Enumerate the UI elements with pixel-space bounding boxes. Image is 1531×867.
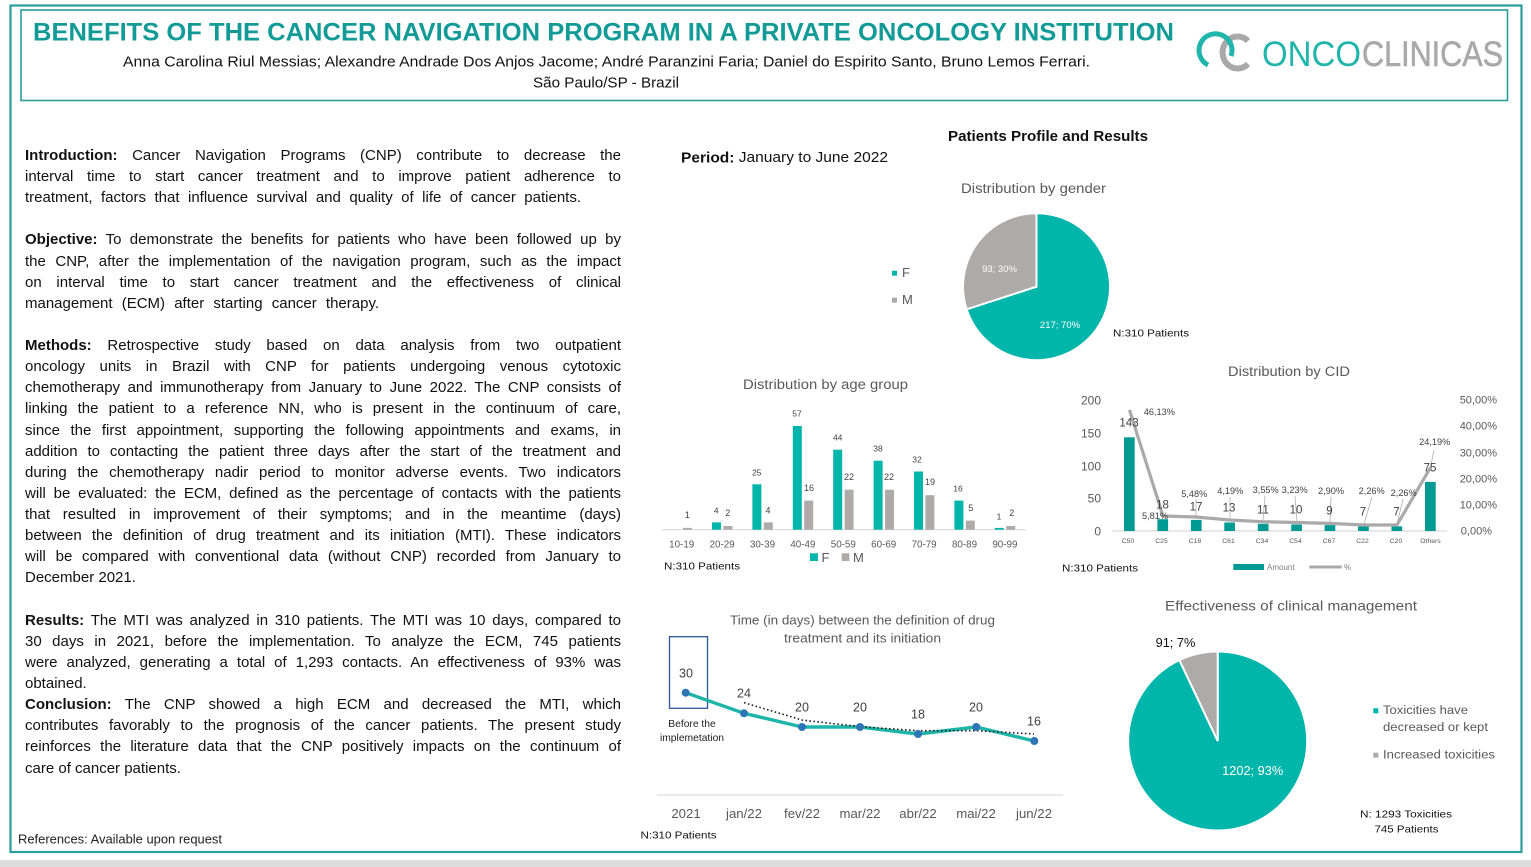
left axis: 100 (1081, 460, 1101, 474)
text block: methods: since the first appointment, supporting the following appointments and exams, in (25, 422, 621, 439)
right axis: 10,00% (1460, 500, 1497, 512)
value labels: F: 4 (714, 506, 719, 516)
value labels: amount: 10 (1290, 504, 1302, 516)
text block: methods: during the chemotherapy nadir period to monitor adverse events. Two indicators (25, 464, 621, 481)
text block: methods: December 2021. (25, 569, 136, 586)
note: N effectiveness: N: 1293 Toxicities (1360, 808, 1452, 820)
trend line (744, 703, 1034, 734)
value labels: amount: 75 (1424, 462, 1436, 474)
percent labels: 2,90% (1318, 486, 1344, 496)
legend: age: M (853, 550, 864, 565)
right axis: 40,00% (1460, 420, 1497, 432)
left axis (1081, 394, 1101, 538)
note: N CID: N:310 Patients (1062, 562, 1138, 574)
category labels: months: jan/22 (725, 806, 762, 821)
category labels: CID: C54 (1289, 538, 1302, 545)
percent labels: 5,48% (1181, 489, 1207, 499)
category labels: age: 90-99 (992, 540, 1017, 550)
text block: methods: oncology units in Brazil with CNP for patients undergoing venous cytotoxic (25, 358, 621, 375)
text block: introduction: Introduction: Cancer Navigation Programs (CNP) contribute to decrease the (25, 147, 621, 164)
data line (686, 693, 1034, 741)
text block: conclusion: care of cancer patients. (25, 760, 181, 777)
category labels: age: 70-79 (912, 540, 937, 550)
label: 91: 91; 7% (1156, 635, 1195, 650)
text block: conclusion (25, 696, 622, 777)
markers (682, 689, 1038, 745)
category labels: age: 60-69 (871, 540, 896, 550)
text block: results: were analyzed, generating a total of 1,293 contacts. An effectiveness of 93% was (25, 654, 621, 671)
legend: gender (892, 265, 913, 307)
logo: OncoClínicas: CLINICAS (1362, 35, 1503, 74)
text block: results: 30 days in 2021, before the implementation. To analyze the ECM, 745 patients (25, 633, 621, 650)
legend: CID: Amount (1267, 563, 1295, 572)
category labels: age: 50-59 (831, 540, 856, 550)
text block: methods: between the definition of drug treatment and its initiation (MTI). These indicators (25, 527, 621, 544)
percent labels: 46,13% (1144, 407, 1175, 417)
note: N effectiveness (1360, 808, 1452, 836)
title: BENEFITS OF THE CANCER NAVIGATION PROGRAM IN A PRIVATE ONCOLOGY INSTITUTION (33, 18, 1174, 46)
category labels: CID: C18 (1189, 538, 1201, 545)
value labels: days (679, 666, 1041, 728)
annotation: before implementation: implemetation (660, 733, 724, 744)
pie slice: F (967, 213, 1110, 360)
legend: gender: M (902, 292, 913, 307)
text block: objective: management (ECM) after starting cancer therapy. (25, 295, 379, 312)
header box (21, 10, 1508, 100)
label: F value: 217; 70% (1040, 320, 1081, 331)
legend: effectiveness (1373, 705, 1495, 762)
value labels: F: 57 (792, 408, 802, 418)
value labels: amount: 9 (1326, 506, 1333, 518)
value labels: F: 44 (833, 432, 843, 442)
value labels: M: 2 (1009, 508, 1014, 518)
value labels: F: 1 (997, 512, 1002, 522)
value labels: M (685, 472, 1014, 520)
text block: introduction: interval time to start cancer treatment and to improve patient adherence to (25, 168, 621, 185)
legend: effectiveness: decreased or kept (1383, 722, 1489, 734)
category labels: CID (1122, 538, 1441, 545)
text column (25, 147, 622, 777)
percent labels: 4,19% (1217, 486, 1243, 496)
value labels: M: 1 (685, 510, 690, 520)
percent labels (1142, 407, 1450, 521)
value labels: amount (1119, 418, 1436, 518)
category labels: months: mai/22 (956, 806, 996, 821)
logo: OncoClínicas: ONCO (1262, 35, 1361, 74)
text block: methods: chemotherapy and immunotherapy from January to June 2022. The CNP consists of (25, 379, 621, 396)
right axis (1460, 394, 1497, 538)
text block: methods: linking the patient to a reference NN, who is present in the continuum of care, (25, 400, 621, 417)
affiliation: São Paulo/SP - Brazil (533, 76, 679, 92)
value labels: F: 16 (953, 484, 963, 494)
category labels: age: 40-49 (790, 540, 815, 550)
leader lines (1196, 450, 1434, 524)
percent labels: 24,19% (1419, 437, 1450, 447)
category labels: months: mar/22 (839, 806, 881, 821)
category labels: CID: C50 (1122, 538, 1134, 545)
category labels: CID: C67 (1323, 538, 1335, 545)
period: Period: January to June 2022 (681, 149, 888, 166)
label: M value: 93; 30% (982, 264, 1017, 275)
legend: gender: F (902, 265, 910, 280)
footer shadow band (0, 860, 1531, 867)
pie slice: increased (1179, 651, 1218, 741)
category labels: CID: C22 (1356, 538, 1369, 545)
chart title: effectiveness: Effectiveness of clinical management (1165, 598, 1417, 614)
category labels: age: 20-29 (710, 540, 735, 550)
value labels: days: 30 (679, 666, 693, 680)
left axis: 0 (1094, 524, 1101, 538)
text block: conclusion: reinforces the literature data that the CNP positively impacts on the continuum of (25, 738, 621, 755)
line: percent (1130, 410, 1430, 525)
text block: methods (25, 337, 622, 586)
pie slice: M (963, 213, 1036, 309)
chart: distribution by age group (662, 377, 1026, 572)
value labels: F: 32 (912, 454, 922, 464)
text block: objective: Objective: To demonstrate the benefits for patients who have been followed up by (25, 231, 621, 248)
text block: conclusion: Conclusion: The CNP showed a high ECM and decreased the MTI, which (25, 696, 621, 713)
value labels: amount: 18 (1156, 500, 1169, 512)
category labels: CID: C34 (1256, 538, 1268, 545)
value labels: amount: 143 (1119, 418, 1139, 430)
text block: introduction (25, 147, 621, 206)
bars: amount (1124, 437, 1436, 531)
legend: CID (1233, 563, 1351, 572)
category labels: months: jun/22 (1015, 806, 1052, 821)
chart: distribution by CID (1062, 364, 1497, 574)
value labels: amount: 7 (1360, 506, 1366, 518)
category labels: CID: Others (1420, 538, 1441, 545)
chart: effectiveness of clinical management (1128, 598, 1495, 836)
category labels: months: fev/22 (784, 806, 820, 821)
category labels: months: abr/22 (899, 806, 937, 821)
value labels: F: 38 (873, 444, 883, 454)
category labels: age (669, 540, 1017, 550)
value labels: days: 20 (795, 700, 809, 714)
label: 1202: 1202; 93% (1222, 763, 1283, 778)
category labels: age: 80-89 (952, 540, 977, 550)
text block: methods: will be evaluated: the ECM, defined as the percentage of contacts with the patients (25, 485, 621, 502)
percent labels: 3,23% (1282, 485, 1308, 495)
category labels: age: 10-19 (669, 540, 694, 550)
legend: effectiveness: Increased toxicities (1383, 750, 1495, 762)
text block: conclusion: contributes favorably to the prognosis of the cancer patients. The present study (25, 717, 621, 734)
value labels: days: 20 (853, 700, 867, 714)
text block: results (25, 612, 621, 692)
right axis: 50,00% (1460, 394, 1497, 406)
legend: age (810, 550, 864, 565)
legend: CID: % (1344, 563, 1351, 572)
text block: methods: Methods: Retrospective study based on data analysis from two outpatient (25, 337, 621, 354)
value labels: M: 22 (844, 472, 854, 482)
percent labels: 5,81% (1142, 511, 1168, 521)
value labels: amount: 17 (1190, 502, 1202, 514)
value labels: M: 16 (804, 483, 814, 493)
annotation: before implementation: Before the (668, 719, 716, 730)
heading: patients profile: Patients Profile and Results (948, 128, 1148, 145)
category labels: months (671, 806, 1052, 821)
value labels: M: 19 (925, 477, 935, 487)
bars: M (683, 490, 1015, 530)
axis (657, 794, 1063, 796)
category labels: CID: C25 (1155, 538, 1168, 545)
chart title: time: treatment and its initiation (784, 630, 941, 646)
value labels: M: 2 (725, 508, 730, 518)
percent labels: 2,26% (1391, 488, 1417, 498)
bars: F (712, 426, 1004, 530)
text block: results: Results: The MTI was analyzed in 310 patients. The MTI was 10 days, compared to (25, 612, 621, 629)
percent labels: 2,26% (1359, 486, 1385, 496)
right axis: 30,00% (1460, 448, 1497, 460)
text block: methods: that resulted in improvement of their symptoms; and in the meantime (days) (25, 506, 621, 523)
annotation: before implementation (660, 719, 724, 744)
category labels: age: 30-39 (750, 540, 775, 550)
value labels: days: 18 (911, 708, 925, 722)
chart: time to treatment line chart (640, 612, 1063, 842)
value labels: days: 24 (737, 686, 751, 700)
chart title: time (730, 612, 995, 646)
chart title: time: Time (in days) between the definition of drug (730, 612, 995, 628)
right axis: 20,00% (1460, 474, 1497, 486)
text block: objective (25, 231, 621, 312)
text block: results: obtained. (25, 675, 87, 692)
chart: distribution by gender (892, 181, 1189, 360)
left axis: 200 (1081, 394, 1101, 408)
value labels: F (714, 408, 1002, 522)
value labels: amount: 13 (1223, 502, 1235, 514)
text block: objective: on interval time to start cancer treatment and the effectiveness of clinical (25, 274, 621, 291)
value labels: M: 5 (968, 503, 973, 513)
authors: Anna Carolina Riul Messias; Alexandre Andrade Dos Anjos Jacome; André Paranzini Faria; Daniel do Espirito Santo, Bruno Lemos Ferrari. (123, 54, 1090, 70)
legend: age: F (822, 550, 830, 565)
value labels: M: 4 (765, 506, 771, 516)
value labels: amount: 11 (1257, 504, 1269, 516)
chart title: CID: Distribution by CID (1228, 364, 1350, 379)
value labels: M: 22 (884, 472, 894, 482)
chart title: age: Distribution by age group (743, 377, 908, 392)
logo: OncoClínicas (1199, 34, 1503, 74)
category labels: CID: C61 (1222, 538, 1235, 545)
references: References: Available upon request (18, 832, 223, 846)
note: N gender: N:310 Patients (1113, 328, 1189, 340)
value labels: days: 16 (1027, 714, 1041, 728)
right axis: 0,00% (1461, 526, 1492, 538)
text block: methods: addition to contacting the patient three days after the start of the treatment and (25, 443, 621, 460)
category labels: CID: C20 (1390, 538, 1402, 545)
text block: objective: the CNP, after the implementation of the navigation program, such as the impact (25, 253, 621, 270)
category labels: months: 2021 (671, 806, 701, 821)
note: N age: N:310 Patients (664, 560, 740, 572)
text block: introduction: treatment, factors that influence survival and quality of life of cancer patients. (25, 189, 581, 206)
value labels: F: 25 (752, 468, 762, 478)
left axis: 150 (1081, 426, 1101, 440)
value labels: days: 20 (969, 700, 983, 714)
text block: methods: will be compared with conventional data (without CNP) recorded from January to (25, 548, 621, 565)
left axis: 50 (1088, 492, 1101, 506)
note: N time: N:310 Patients (640, 830, 716, 842)
highlight box: 2021 (670, 637, 708, 708)
value labels: amount: 7 (1393, 506, 1400, 518)
pie slice: decreased or kept (1128, 652, 1307, 830)
legend: effectiveness: Toxicities have (1383, 705, 1468, 717)
percent labels: 3,55% (1253, 485, 1279, 495)
chart title: gender: Distribution by gender (961, 181, 1107, 196)
note: N effectiveness: 745 Patients (1374, 824, 1438, 836)
